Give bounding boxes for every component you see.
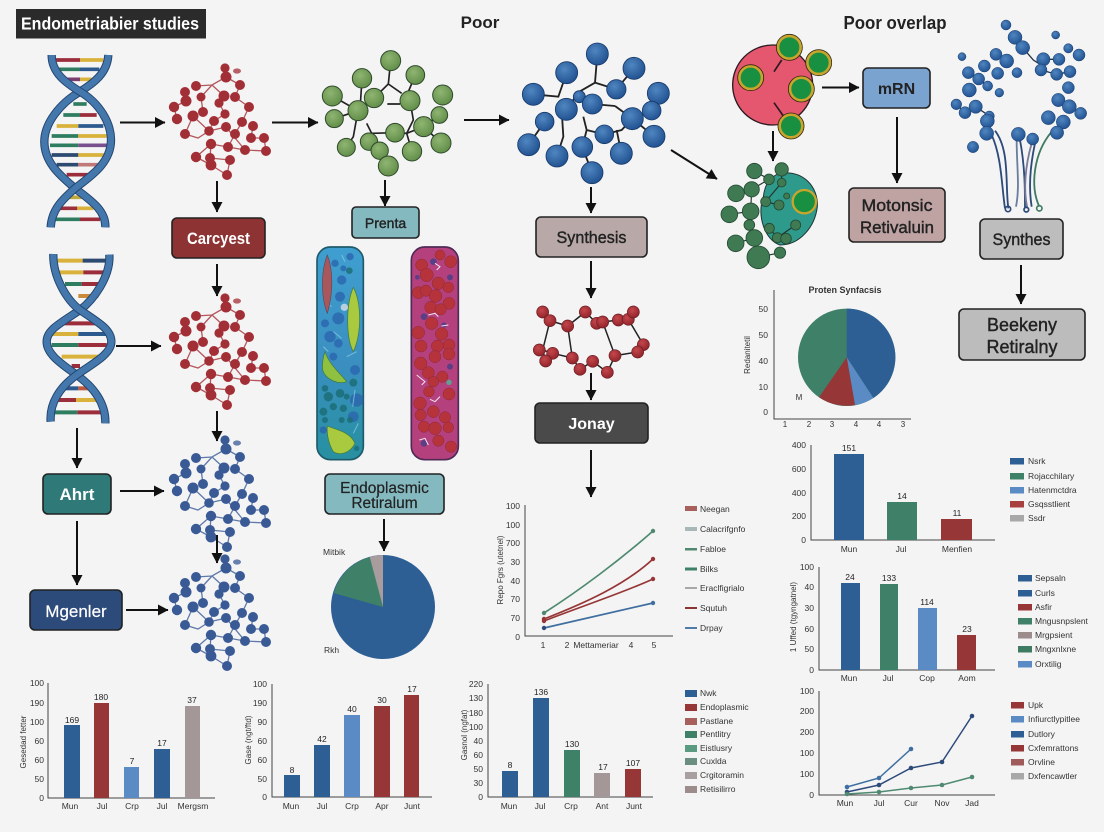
box: Mgenler: Mgenler bbox=[45, 602, 107, 621]
bar chart: right upper: 14 bbox=[897, 491, 907, 501]
bar chart: right upper: 200 bbox=[792, 511, 806, 521]
bar chart: right middle: 40 bbox=[805, 582, 814, 592]
bar chart: bottom left 2: Jul bbox=[317, 801, 328, 811]
bar chart: bottom centre: 40 bbox=[474, 736, 483, 746]
bar chart: bottom left 2: Junt bbox=[404, 801, 421, 811]
pie chart: Proten Synfacsis: 50 bbox=[759, 330, 768, 340]
box: Beekeny Retiralny: Beekeny bbox=[987, 315, 1057, 335]
icon: red molecule cluster middle bbox=[169, 293, 271, 410]
pie chart: Proten Synfacsis: 4 bbox=[877, 420, 882, 429]
legend: bottom centre bars: Cuxlda bbox=[700, 756, 727, 766]
legend: line chart: Bilks bbox=[700, 564, 718, 574]
pie chart: endoplasmic bbox=[323, 547, 435, 659]
bar chart: bottom left 2: 30 bbox=[377, 695, 387, 705]
pie chart: Proten Synfacsis: 0 bbox=[763, 407, 768, 417]
legend: right middle bars bbox=[1018, 573, 1089, 669]
bar chart: bottom centre: 180 bbox=[469, 708, 483, 718]
box: Synthes: Synthes bbox=[992, 230, 1050, 249]
bar chart: bottom centre: 17 bbox=[598, 762, 608, 772]
legend: right upper bars: Ssdr bbox=[1028, 513, 1046, 523]
bar chart: bottom centre: Gasnol (ngfat) bbox=[460, 709, 469, 760]
pie chart: endoplasmic: Rkh bbox=[324, 645, 339, 655]
pie chart: Proten Synfacsis: 3 bbox=[830, 420, 835, 429]
bar chart: bottom left 2: 0 bbox=[262, 792, 267, 802]
box: Mgenler bbox=[30, 590, 122, 630]
bar chart: right middle bbox=[789, 562, 995, 683]
icon: DNA helix bottom bbox=[47, 254, 111, 423]
line chart: right lower: 100 bbox=[800, 769, 814, 779]
bar chart: right upper: 400 bbox=[792, 488, 806, 498]
bar chart: bottom left 1: 180 bbox=[94, 692, 108, 702]
legend: right lower lines: Cxfemrattons bbox=[1028, 743, 1079, 753]
line chart: right lower: 100 bbox=[800, 748, 814, 758]
legend: line chart: Fabloe bbox=[700, 544, 726, 554]
box: Synthesis bbox=[536, 217, 647, 257]
box: Jonay bbox=[535, 403, 648, 443]
line chart: centre: 70 bbox=[511, 594, 520, 604]
legend: right upper bars: Nsrk bbox=[1028, 456, 1046, 466]
heading: Poor overlap: Poor overlap bbox=[844, 13, 947, 33]
bar chart: bottom left 2: Apr bbox=[375, 801, 389, 811]
bar chart: right upper: 11 bbox=[953, 508, 962, 518]
icon: red ring molecule bbox=[533, 306, 649, 378]
legend: right middle bars: Mngxnlxne bbox=[1035, 644, 1076, 654]
icon: blue molecule cluster lower bbox=[169, 554, 271, 671]
bar chart: right middle: 114 bbox=[920, 597, 934, 607]
pie chart: Proten Synfacsis bbox=[743, 285, 911, 429]
line chart: centre: 70 bbox=[511, 613, 520, 623]
box: Endoplasmic Retiralum: Endoplasmic bbox=[340, 480, 429, 497]
bar chart: right middle: 100 bbox=[800, 562, 814, 572]
bar chart: bottom left 2: 60 bbox=[258, 736, 267, 746]
bar chart: bottom left 2: 8 bbox=[290, 765, 295, 775]
bar chart: bottom left 1: 60 bbox=[35, 736, 44, 746]
box: Ahrt bbox=[43, 474, 111, 514]
bar chart: right upper: Jul bbox=[896, 544, 907, 554]
bar chart: bottom left 2: Crp bbox=[345, 801, 359, 811]
legend: line chart bbox=[685, 504, 746, 633]
line chart: right lower: Cur bbox=[904, 798, 918, 808]
bar chart: bottom left 2: 90 bbox=[258, 717, 267, 727]
bar chart: bottom left 2: Gase (ngt/ftd) bbox=[244, 715, 253, 764]
bar chart: right middle: 1 Uffed (tgyngatnel) bbox=[789, 582, 798, 652]
bar chart: right middle: 24 bbox=[845, 572, 855, 582]
box: Prenta bbox=[352, 207, 419, 238]
bar chart: bottom left 1: 100 bbox=[30, 717, 44, 727]
bar chart: right upper: Menfien bbox=[942, 544, 972, 554]
box: Synthesis: Synthesis bbox=[556, 228, 626, 247]
bar chart: bottom centre bbox=[460, 679, 653, 811]
icon: blue molecules with filaments bbox=[951, 20, 1087, 212]
pie chart: Proten Synfacsis: 3 bbox=[901, 420, 906, 429]
bar chart: bottom centre: 100 bbox=[469, 722, 483, 732]
pie chart: Proten Synfacsis: Redanitetil bbox=[743, 336, 752, 374]
line chart: right lower: Jad bbox=[965, 798, 979, 808]
bar chart: bottom left 1: Jul bbox=[97, 801, 108, 811]
line chart: centre: 100 bbox=[506, 501, 520, 511]
title: Endometriabier studies bbox=[16, 9, 206, 38]
line chart: right lower: Jul bbox=[874, 798, 885, 808]
bar chart: bottom left 1: 60 bbox=[35, 755, 44, 765]
bar chart: bottom left 1: Mergsm bbox=[178, 801, 208, 811]
icon: green molecule network bbox=[322, 51, 453, 176]
pie chart: endoplasmic: Mitbik bbox=[323, 547, 346, 557]
bar chart: bottom centre: 0 bbox=[478, 792, 483, 802]
bar chart: right middle: Mun bbox=[841, 673, 858, 683]
line chart: centre: Mettameriar bbox=[573, 640, 619, 650]
bar chart: right upper: Mun bbox=[841, 544, 858, 554]
bar chart: right middle: Aom bbox=[958, 673, 976, 683]
bar chart: bottom left 1: 0 bbox=[39, 793, 44, 803]
pie chart: Proten Synfacsis: 40 bbox=[759, 356, 768, 366]
legend: right middle bars: Curls bbox=[1035, 588, 1055, 598]
bar chart: right middle: 133 bbox=[882, 573, 896, 583]
bar chart: bottom left 2: 17 bbox=[407, 684, 417, 694]
line chart: centre: 0 bbox=[515, 632, 520, 642]
bar chart: bottom centre: 8 bbox=[508, 760, 513, 770]
legend: right upper bars bbox=[1010, 456, 1077, 523]
legend: bottom centre bars: Nwk bbox=[700, 688, 717, 698]
bar chart: bottom left 1: 169 bbox=[65, 715, 79, 725]
bar chart: bottom centre: Mun bbox=[501, 801, 518, 811]
bar chart: right upper bbox=[792, 440, 995, 554]
bar chart: bottom left 1: Crp bbox=[125, 801, 139, 811]
legend: bottom centre bars: Pastlane bbox=[700, 716, 733, 726]
bar chart: right middle: 0 bbox=[809, 665, 814, 675]
legend: right middle bars: Mrgpsient bbox=[1035, 630, 1073, 640]
icon: DNA helix top bbox=[44, 55, 111, 227]
bar chart: right upper: 600 bbox=[792, 464, 806, 474]
box: Motonsic Retivaluin bbox=[849, 188, 945, 242]
title: Endometriabier studies: Endometriabier studies bbox=[21, 14, 199, 34]
bar chart: bottom left 1: Mun bbox=[62, 801, 79, 811]
line chart: centre bbox=[496, 501, 673, 650]
bar chart: bottom left 2: 50 bbox=[258, 774, 267, 784]
bar chart: right middle: 60 bbox=[805, 624, 814, 634]
legend: right lower lines: Upk bbox=[1028, 700, 1044, 710]
bar chart: bottom left 2 bbox=[244, 679, 432, 811]
bar chart: right upper: 400 bbox=[792, 440, 806, 450]
legend: bottom centre bars bbox=[685, 688, 749, 794]
bar chart: bottom left 2: 100 bbox=[253, 679, 267, 689]
line chart: right lower: Mun bbox=[837, 798, 854, 808]
bar chart: right upper: 151 bbox=[842, 443, 856, 453]
box: mRN bbox=[863, 68, 930, 108]
box: Beekeny Retiralny bbox=[959, 309, 1085, 360]
bar chart: bottom left 1: 37 bbox=[187, 695, 197, 705]
bar chart: bottom left 2: 60 bbox=[258, 755, 267, 765]
legend: right lower lines bbox=[1011, 700, 1080, 781]
legend: right middle bars: Asfir bbox=[1035, 602, 1052, 612]
bar chart: bottom left 1: 50 bbox=[35, 774, 44, 784]
line chart: right lower: Nov bbox=[934, 798, 950, 808]
bar chart: bottom left 1 bbox=[19, 678, 215, 811]
pie chart: Proten Synfacsis: M bbox=[796, 393, 803, 402]
bar chart: bottom centre: Crp bbox=[564, 801, 578, 811]
box: Motonsic Retivaluin: Motonsic bbox=[862, 196, 933, 215]
bar chart: bottom left 1: 17 bbox=[157, 738, 167, 748]
pie chart: Proten Synfacsis: 1 bbox=[783, 420, 788, 429]
line chart: centre: 4 bbox=[629, 640, 634, 650]
line chart: centre: Repo Fgrs (utetnel) bbox=[496, 535, 505, 604]
legend: bottom centre bars: Crgitoramin bbox=[700, 770, 744, 780]
bar chart: bottom centre: 130 bbox=[565, 739, 579, 749]
box: Endoplasmic Retiralum bbox=[325, 474, 444, 514]
legend: line chart: Neegan bbox=[700, 504, 730, 514]
line chart: right lower: 200 bbox=[800, 706, 814, 716]
line chart: centre: 5 bbox=[652, 640, 657, 650]
legend: line chart: Drpay bbox=[700, 623, 723, 633]
bar chart: bottom centre: Jul bbox=[535, 801, 546, 811]
pie chart: Proten Synfacsis: 4 bbox=[854, 420, 859, 429]
pie chart: Proten Synfacsis: 50 bbox=[759, 304, 768, 314]
legend: right lower lines: Orvline bbox=[1028, 757, 1055, 767]
bar chart: right upper: 0 bbox=[801, 535, 806, 545]
legend: line chart: Calacrifgnfo bbox=[700, 524, 746, 534]
legend: right upper bars: Gsqsstlient bbox=[1028, 499, 1071, 509]
legend: right upper bars: Rojacchilary bbox=[1028, 471, 1075, 481]
bar chart: bottom centre: 136 bbox=[534, 687, 548, 697]
pie chart: Proten Synfacsis: 2 bbox=[807, 420, 812, 429]
bar chart: bottom left 1: Gesedad fetter bbox=[19, 715, 28, 768]
legend: right lower lines: Dutlory bbox=[1028, 729, 1056, 739]
legend: bottom centre bars: Retisilirro bbox=[700, 784, 736, 794]
line chart: right lower: 100 bbox=[800, 686, 814, 696]
legend: right upper bars: Hatenmctdra bbox=[1028, 485, 1077, 495]
box: Synthes bbox=[980, 219, 1063, 259]
bar chart: bottom left 2: 40 bbox=[347, 704, 357, 714]
bar chart: bottom centre: 30 bbox=[474, 778, 483, 788]
box: Prenta: Prenta bbox=[365, 215, 406, 231]
pie chart: Proten Synfacsis: 10 bbox=[759, 382, 768, 392]
bar chart: bottom centre: 60 bbox=[474, 750, 483, 760]
line chart: right lower bbox=[800, 686, 995, 808]
legend: right middle bars: Orxtilig bbox=[1035, 659, 1062, 669]
legend: line chart: Eraclfigrialo bbox=[700, 583, 745, 593]
bar chart: bottom left 2: 190 bbox=[253, 698, 267, 708]
legend: line chart: Squtuh bbox=[700, 603, 727, 613]
line chart: right lower: 200 bbox=[800, 727, 814, 737]
line chart: centre: 700 bbox=[506, 538, 520, 548]
bar chart: bottom left 1: 100 bbox=[30, 678, 44, 688]
line chart: centre: 2 bbox=[565, 640, 570, 650]
icon: blue molecule network bbox=[518, 43, 669, 184]
bar chart: bottom left 1: Jul bbox=[157, 801, 168, 811]
legend: right lower lines: Infiurctlypitlee bbox=[1028, 714, 1080, 724]
legend: right lower lines: Dxfencawtler bbox=[1028, 771, 1077, 781]
line chart: centre: 40 bbox=[511, 576, 520, 586]
bar chart: bottom centre: 220 bbox=[469, 679, 483, 689]
bar chart: right middle: 30 bbox=[805, 603, 814, 613]
bar chart: bottom centre: 130 bbox=[469, 693, 483, 703]
legend: bottom centre bars: Endoplasmic bbox=[700, 702, 749, 712]
line chart: right lower: 0 bbox=[809, 790, 814, 800]
legend: bottom centre bars: Eistlusry bbox=[700, 743, 733, 753]
box: Beekeny Retiralny: Retiralny bbox=[986, 337, 1058, 357]
box: Endoplasmic Retiralum: Retiralum bbox=[351, 495, 418, 512]
bar chart: bottom left 2: 42 bbox=[317, 734, 327, 744]
line chart: centre: 30 bbox=[511, 557, 520, 567]
legend: right middle bars: Sepsaln bbox=[1035, 573, 1066, 583]
bar chart: right middle: Jul bbox=[883, 673, 894, 683]
bar chart: bottom centre: Junt bbox=[626, 801, 643, 811]
bar chart: right middle: 50 bbox=[805, 644, 814, 654]
pie chart: Proten Synfacsis: Proten Synfacsis bbox=[808, 285, 882, 295]
bar chart: bottom centre: 50 bbox=[474, 764, 483, 774]
heading: Poor: Poor bbox=[461, 13, 500, 32]
bar chart: bottom left 1: 7 bbox=[130, 756, 135, 766]
box: Jonay: Jonay bbox=[568, 416, 615, 433]
legend: bottom centre bars: Pentlitry bbox=[700, 729, 731, 739]
box: Carcyest bbox=[172, 218, 265, 258]
icon: pink cell with green vesicles bbox=[733, 34, 832, 139]
bar chart: right middle: 23 bbox=[962, 624, 972, 634]
icon: magenta tissue tube with red cells bbox=[411, 247, 458, 460]
bar chart: bottom left 1: 190 bbox=[30, 698, 44, 708]
bar chart: right middle: Cop bbox=[919, 673, 935, 683]
bar chart: bottom left 2: Mun bbox=[283, 801, 300, 811]
flow arrows bbox=[77, 88, 1021, 610]
icon: teal tissue tube bbox=[317, 247, 363, 460]
line chart: centre: 100 bbox=[506, 520, 520, 530]
box: Carcyest: Carcyest bbox=[187, 229, 250, 248]
line chart: centre: 1 bbox=[541, 640, 546, 650]
bar chart: bottom centre: Ant bbox=[596, 801, 609, 811]
box: Ahrt: Ahrt bbox=[60, 485, 95, 504]
bar chart: bottom centre: 107 bbox=[626, 758, 640, 768]
icon: blue molecule cluster upper bbox=[169, 435, 271, 552]
box: Motonsic Retivaluin: Retivaluin bbox=[860, 218, 934, 237]
legend: right middle bars: Mngusnpslent bbox=[1035, 616, 1089, 626]
icon: red molecule cluster top bbox=[169, 63, 271, 180]
icon: teal cell with green network bbox=[721, 163, 817, 269]
box: mRN: mRN bbox=[878, 81, 915, 98]
